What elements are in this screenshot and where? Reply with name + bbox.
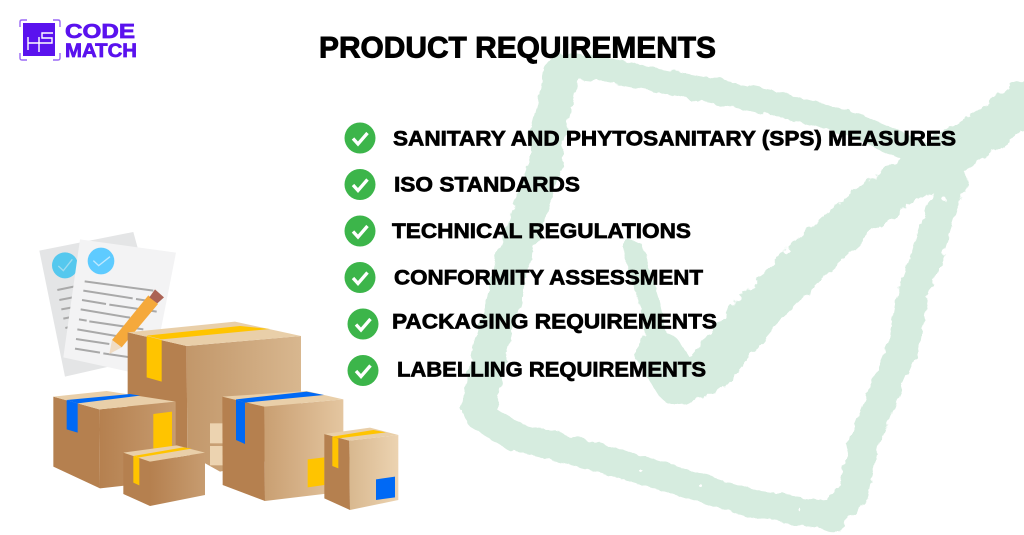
logo wordmark: MATCH xyxy=(65,41,137,62)
icon: small front box xyxy=(123,445,205,506)
background: large green hand-drawn checkmark in box xyxy=(479,65,1024,517)
illustration: documents and cardboard boxes xyxy=(39,232,398,510)
icon: right box xyxy=(222,391,343,501)
item: technical regulations: TECHNICAL REGULATIONS xyxy=(392,220,691,243)
item: conformity assessment: CONFORMITY ASSESSMENT xyxy=(394,266,703,290)
item: packaging requirements: PACKAGING REQUIREMENTS xyxy=(392,310,717,334)
icon: large box xyxy=(128,322,301,472)
checklist xyxy=(344,122,956,386)
item: SPS measures: SANITARY AND PHYTOSANITARY (SPS) MEASURES xyxy=(393,128,956,150)
logo: HS Code Match xyxy=(20,20,137,62)
logo wordmark: CODE xyxy=(65,20,135,43)
item: labelling requirements xyxy=(348,355,706,386)
item: technical regulations xyxy=(344,216,691,246)
item: ISO standards xyxy=(344,169,580,200)
item: SPS measures xyxy=(344,122,956,154)
icon: tiny right box xyxy=(324,428,398,510)
item: ISO standards: ISO STANDARDS xyxy=(394,174,580,196)
title: PRODUCT REQUIREMENTS xyxy=(319,32,716,64)
icon: pencil xyxy=(109,289,164,354)
logo icon xyxy=(20,20,60,60)
item: packaging requirements xyxy=(348,308,717,340)
logo wordmark xyxy=(65,20,137,62)
icon: front document xyxy=(63,239,176,377)
item: labelling requirements: LABELLING REQUIREMENTS xyxy=(397,358,706,382)
item: conformity assessment xyxy=(344,262,703,293)
icon: back document xyxy=(39,232,167,377)
icon: left box xyxy=(53,391,176,488)
